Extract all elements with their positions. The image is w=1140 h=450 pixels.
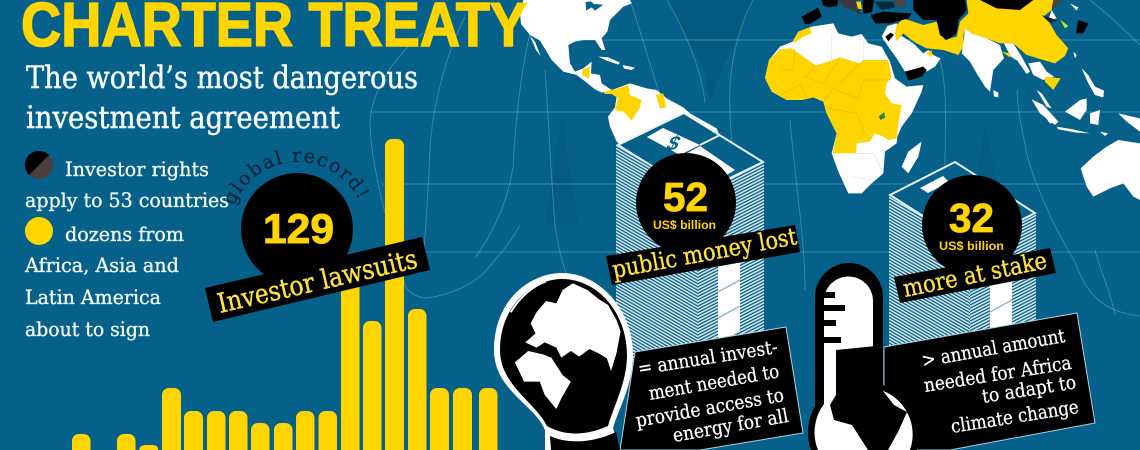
- indonesia and australia: [1032, 98, 1140, 200]
- legend: [24, 151, 229, 341]
- stack lid: $: [663, 133, 684, 155]
- legend text: Investor rights: [65, 157, 209, 181]
- north america: [520, 0, 635, 93]
- number 52: 52: [663, 174, 708, 220]
- legend text: Africa, Asia and: [24, 253, 179, 277]
- unit: US$ billion: [653, 218, 716, 232]
- africa silhouette: [830, 382, 907, 450]
- legend text: dozens from: [65, 222, 184, 246]
- callout: energy for all: ment needed to: [647, 360, 781, 405]
- badge: 129 investor lawsuits: [205, 150, 430, 322]
- asia: [882, 0, 1104, 123]
- subtitle: [26, 60, 418, 136]
- subtitle: investment agreement: [26, 100, 340, 136]
- africa: [765, 23, 923, 193]
- icon: investor rights circle: [25, 151, 53, 179]
- label: public money lost: public money lost: [610, 222, 799, 284]
- label: investor lawsuits: Investor lawsuits: [215, 244, 420, 320]
- stack lid: [618, 113, 763, 194]
- number 129: 129: [263, 205, 334, 252]
- money stack: 32 billion: [889, 162, 1056, 400]
- callout: adapt to climate change: to adapt to: [980, 371, 1078, 408]
- unit: US$ billion: [939, 239, 1004, 253]
- label: more at stake: more at stake: [901, 246, 1049, 303]
- callout: adapt to climate change: climate change: [949, 396, 1080, 438]
- circle 52: [636, 153, 736, 253]
- number 32: 32: [949, 195, 994, 241]
- legend text: apply to 53 countries: [25, 188, 229, 212]
- callout: adapt to climate change: > annual amount: [920, 325, 1067, 372]
- world map: [520, 0, 1140, 200]
- callout: energy for all: = annual invest-: [636, 336, 779, 380]
- money stack: 52 billion: [606, 113, 800, 400]
- europe and central asia: [802, 0, 1062, 40]
- stack sides: [616, 145, 764, 400]
- subtitle: The world’s most dangerous: [26, 60, 418, 96]
- callout: adapt to climate change: needed for Africa: [922, 352, 1073, 397]
- callout: energy for all: [620, 327, 803, 450]
- south america: [603, 83, 720, 150]
- stack sides: [889, 195, 1036, 400]
- icon: about to sign circle: [25, 217, 53, 245]
- map graticule: [370, 0, 1140, 330]
- legend text: Latin America: [25, 285, 161, 309]
- legend text: about to sign: [25, 317, 150, 341]
- icon: thermometer with africa: [808, 263, 919, 450]
- callout: energy for all: provide access to: [634, 384, 786, 432]
- icon: lightbulb globe: [494, 273, 633, 450]
- stack lid: [890, 162, 1035, 246]
- mercury column: [836, 346, 876, 395]
- legend text: [24, 157, 229, 341]
- arc label: global record: global record!: [226, 150, 370, 206]
- callout: adapt to climate change: [884, 313, 1095, 450]
- bar chart: investor lawsuits per year: [72, 139, 498, 450]
- thermometer ticks: [824, 292, 845, 343]
- callout: energy for all: energy for all: [671, 405, 790, 447]
- circle 32: [922, 175, 1022, 275]
